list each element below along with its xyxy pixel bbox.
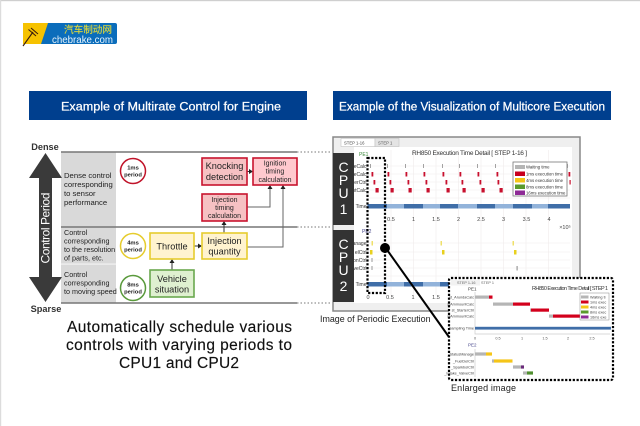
- chart: CPU1 timing marks: 4: [547, 217, 551, 223]
- box: injection timing calculation: [202, 194, 247, 221]
- chart title: RH850 Execution Time Detail [ STEP 1-16 ]: [412, 150, 527, 157]
- label: CPU 1 block: U: [338, 185, 349, 201]
- label: CPU 2 block: C: [338, 236, 349, 252]
- box: injection quantity: [202, 233, 247, 259]
- legend: CPU1 chart: 4ms execution time: [526, 178, 564, 183]
- text: control for parts: to the resolution: [64, 245, 115, 254]
- box: injection quantity: quantity: [208, 246, 241, 256]
- panel: multirate control diagram: [29, 142, 331, 314]
- inset legend: [580, 293, 609, 320]
- box: injection timing calculation: calculation: [208, 213, 241, 220]
- legend: CPU1 chart: 16ms execution time: [526, 190, 566, 196]
- inset chart: PE2 bars: _Intake_ValveCtrl: [443, 372, 474, 376]
- caption: image of periodic execution: Image of Periodic Execution: [320, 314, 431, 324]
- inset chart: PE2 bars: [443, 349, 533, 377]
- chart: CPU1 timing marks: 2: [457, 217, 460, 223]
- inset chart: PE1 bars: 2: [567, 336, 569, 340]
- inset chart: PE2 bars: _StatusManage: [446, 352, 474, 356]
- chart: CPU1 timing marks: 1.5: [432, 217, 440, 223]
- box: vehicle situation: Vehicle: [157, 274, 187, 284]
- box: knocking detection: Knocking: [206, 161, 243, 171]
- chart: CPU1 timing marks: ×10⁵: [559, 224, 571, 231]
- chart: CPU1 timing marks: 2.5: [477, 217, 485, 223]
- inset chart: PE1 bars: 2.5: [589, 336, 595, 340]
- label: Sparse: Sparse: [31, 304, 61, 314]
- legend: CPU1 chart: 8ms execution time: [526, 184, 564, 190]
- text: dense control: performance: [64, 198, 107, 207]
- chart: CPU2 timing marks: 0: [366, 295, 370, 301]
- text: automatic scheduling statement: controls with varying periods to: [66, 337, 292, 354]
- box: ignition timing calculation: timing: [266, 168, 284, 176]
- inset legend: 8ms exec: [590, 310, 606, 314]
- chart: CPU2 timing marks: 1: [411, 295, 415, 301]
- chart: CPU1 timing marks: 3: [502, 217, 505, 223]
- text: dense control: Dense control: [64, 171, 112, 180]
- heading: multirate control: Example of Multirate Control for Engine: [61, 100, 281, 114]
- box: vehicle situation: situation: [155, 284, 189, 294]
- inset title: RH850 Execution Time Detail [ STEP 1: [532, 286, 608, 292]
- inset label: PE1: PE1: [468, 286, 477, 292]
- label: CPU 1 block: C: [338, 159, 349, 175]
- legend: CPU1 chart: 1ms execution time: [526, 172, 564, 176]
- icon: 4ms period: period: [124, 248, 142, 254]
- icon: 1ms period: [120, 158, 146, 184]
- label: CPU 1 block: [333, 153, 354, 225]
- chart: CPU1 timing marks: 3.5: [523, 217, 530, 223]
- inset legend: 16ms exe: [590, 316, 606, 320]
- inset legend: 1ms exec: [590, 300, 606, 304]
- chart: CPU1 timing marks: Time: [356, 204, 367, 210]
- icon: 1ms period: period: [124, 172, 142, 178]
- icon: 4ms period: [120, 234, 146, 258]
- chart: CPU2 timing marks: veCtrl: [353, 266, 366, 272]
- icon: 8ms period: period: [124, 290, 142, 296]
- text: control for parts: Control: [64, 228, 88, 237]
- panel: enlarged image: [443, 278, 613, 380]
- icon: 1ms period: 1ms: [127, 166, 139, 172]
- label: CPU 2 block: U: [338, 262, 349, 278]
- legend: CPU1 chart: [513, 162, 567, 196]
- inset chart: PE1 bars: st_StarterCtrl: [452, 308, 474, 312]
- inset label: PE2: PE2: [468, 342, 477, 348]
- inset chart: PE1 bars: stAmmountCalc: [447, 302, 474, 306]
- inset legend: Waiting ti: [590, 296, 606, 300]
- chart: CPU1 timing marks: ntCalc: [352, 188, 367, 194]
- heading: multicore execution: Example of the Visualization of Multicore Execution: [339, 100, 605, 114]
- inset chart: PE1 bars: 1: [521, 336, 523, 340]
- box: injection timing calculation: timing: [215, 205, 234, 212]
- arrows: control flow connectors: [170, 169, 286, 270]
- tabs: STEP 1: [378, 140, 393, 146]
- text: control for moving speed: corresponding: [64, 278, 110, 288]
- box: knocking detection: [202, 158, 247, 185]
- text: control for moving speed: to moving speed: [64, 287, 117, 296]
- chart: CPU2 timing marks: Time: [356, 282, 367, 288]
- inset chart: PE1 bars: 0.5: [495, 336, 501, 340]
- text: control for parts: corresponding: [64, 236, 110, 246]
- box: injection quantity: Injection: [207, 236, 242, 246]
- box: injection timing calculation: Injection: [211, 197, 238, 204]
- chart: CPU1 timing marks: [352, 164, 571, 231]
- heading: multicore execution: [333, 91, 611, 120]
- chart: CPU1 timing marks: erCtrl: [354, 180, 366, 186]
- chart: CPU2 timing marks: 0.5: [386, 295, 394, 301]
- chart: CPU1 timing marks: 1: [412, 217, 415, 223]
- inset chart: PE1 bars: 1.5: [542, 336, 548, 340]
- label: CPU 1 block: 1: [340, 201, 348, 217]
- chart: CPU2 timing marks: [353, 241, 570, 301]
- heading: multirate control: [29, 91, 307, 120]
- inset chart: PE2 bars: _FuelDelCtrl: [452, 360, 474, 364]
- legend: CPU1 chart: Waiting time: [526, 164, 550, 170]
- arrow: control period: [29, 153, 62, 302]
- chart: CPU2 timing marks: elCtrl: [355, 250, 366, 256]
- text: dense control: to sensor: [64, 189, 96, 198]
- icon: 8ms period: 8ms: [127, 282, 139, 288]
- tabs: [451, 280, 494, 286]
- icon: 4ms period: 4ms: [127, 240, 139, 246]
- label: CPU 2 block: 2: [340, 278, 348, 294]
- text: automatic scheduling statement: CPU1 and CPU2: [119, 355, 239, 372]
- chart: CPU2 timing marks: anage: [353, 241, 367, 247]
- caption: enlarged image: Enlarged image: [451, 383, 516, 393]
- label: Dense: Dense: [31, 142, 59, 152]
- icon: 8ms period: [120, 276, 146, 300]
- text: automatic scheduling statement: [66, 319, 292, 372]
- inset chart: PE1 bars: [447, 292, 611, 340]
- box: ignition timing calculation: calculation: [258, 177, 292, 184]
- label: CPU 1 block: P: [339, 172, 348, 188]
- tabs: [341, 138, 399, 146]
- chart: CPU1 timing marks: 0.5: [387, 217, 395, 223]
- inset chart: PE1 bars: stAmmountCalc: [447, 314, 474, 318]
- arrow: control period: Control Period: [38, 192, 52, 264]
- box: vehicle situation: [150, 270, 194, 297]
- tabs: STEP 1-16: [344, 140, 365, 146]
- pointer: line to enlarged image: [380, 243, 449, 337]
- chart: CPU1 timing marks: eCalc: [354, 164, 367, 170]
- chart: CPU2 timing marks: 1.5: [432, 295, 440, 301]
- text: dense control: corresponding: [64, 180, 113, 189]
- box: knocking detection: detection: [206, 172, 243, 182]
- highlight: periodic execution selection: [368, 158, 385, 293]
- inset chart: PE1 bars: Sampling Time: [449, 326, 474, 330]
- inset legend: 4ms exec: [590, 306, 606, 310]
- label: PE1: PE1: [359, 152, 369, 158]
- inset chart: PE1 bars: 0: [474, 336, 476, 340]
- label: CPU 2 block: [333, 230, 354, 302]
- tabs: STEP 1: [481, 281, 494, 285]
- box: throttle: Throttle: [156, 242, 188, 252]
- chart: CPU1 timing marks: eCalc: [354, 172, 367, 178]
- text: automatic scheduling statement: Automatically schedule various: [67, 319, 292, 336]
- label: CPU 2 block: P: [339, 249, 348, 265]
- box: throttle: [150, 233, 194, 259]
- logo: chebrake.com: [23, 23, 117, 46]
- box: ignition timing calculation: [253, 158, 297, 185]
- panel: execution time window: [333, 137, 580, 311]
- chart: CPU2 timing marks: onCtrl: [353, 258, 366, 264]
- logo: chebrake.com: 汽车制动网: [64, 24, 112, 36]
- text: control for moving speed: Control: [64, 270, 88, 279]
- label: PE2: PE2: [362, 229, 372, 235]
- tabs: STEP 1-16: [457, 281, 476, 285]
- inset chart: PE1 bars: st_ArundaCalc: [449, 296, 474, 300]
- box: ignition timing calculation: Ignition: [264, 160, 286, 168]
- inset chart: PE2 bars: _SparkbolCtrl: [450, 366, 474, 370]
- text: control for parts: of parts, etc.: [64, 254, 104, 262]
- logo: chebrake.com: chebrake.com: [52, 35, 113, 46]
